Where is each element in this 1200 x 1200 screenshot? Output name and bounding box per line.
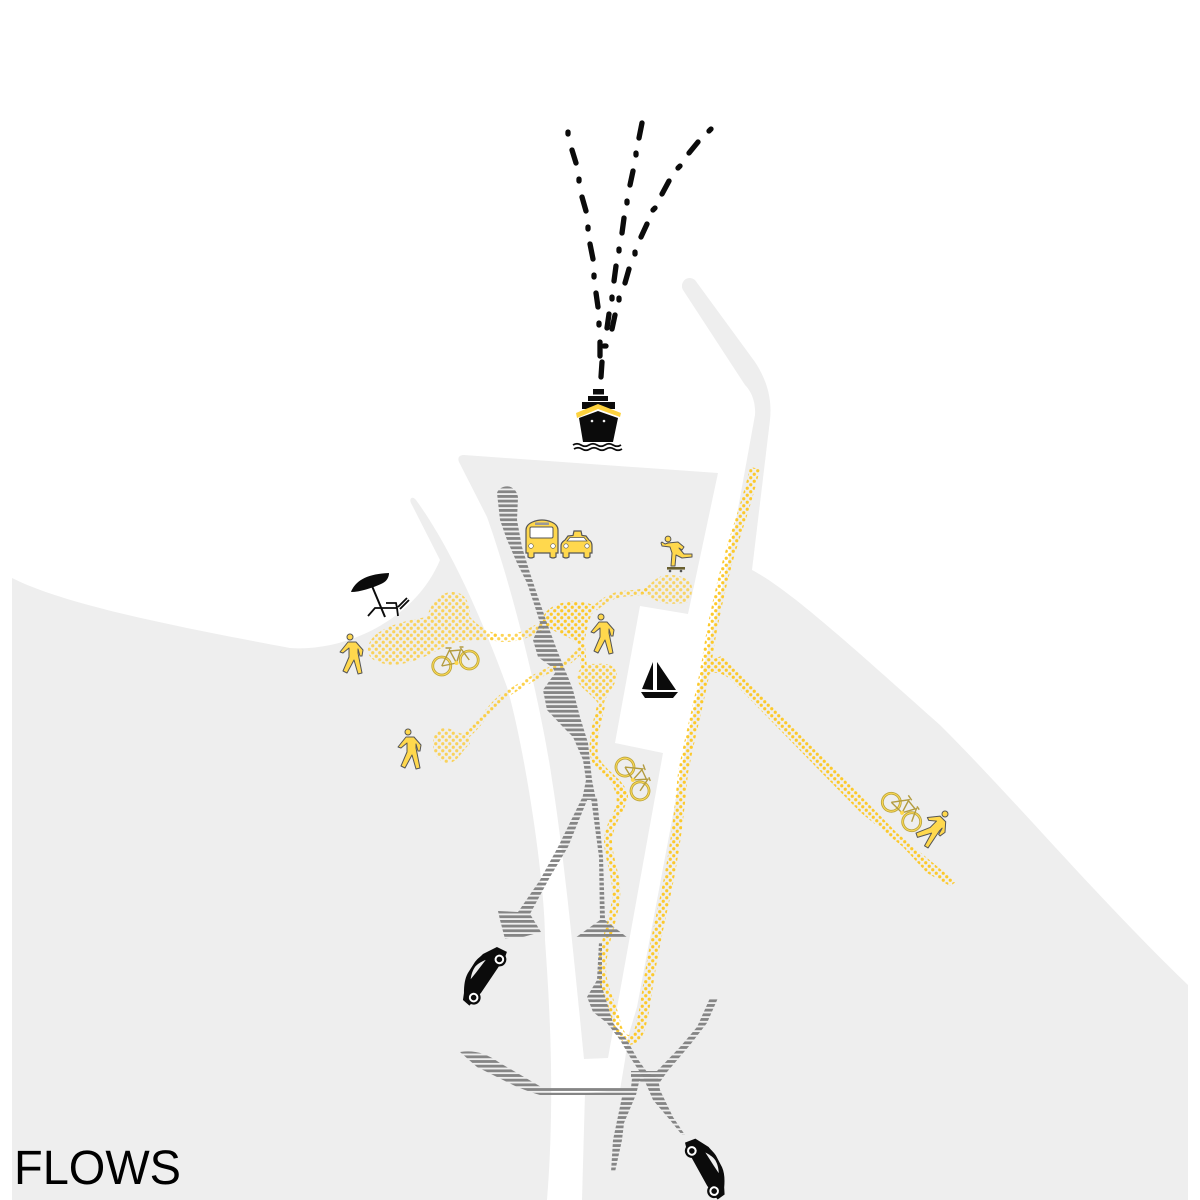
icon: car north [453,940,511,1009]
icon: bicycle pier [613,752,655,804]
icon: pedestrian east [912,805,956,849]
path: east diagonal [700,656,956,886]
ferry routes (dashed) [568,123,711,377]
title: FLOWS [14,1142,181,1195]
icon: pedestrian west [340,634,363,674]
icon: sailboat [641,662,678,698]
east land [582,278,1188,1200]
route: centre [604,123,642,346]
stripe: south spur [587,942,685,1135]
pedestrian and bike flows (yellow halftone) [368,468,956,1040]
link: beach to central plaza [490,620,550,638]
stripe: east arm [631,998,718,1082]
icon: car south [681,1133,735,1200]
icon: ferry [573,389,622,450]
blob: south of plaza [577,664,617,708]
route: left [568,132,602,377]
icon: bus [526,520,558,558]
route: right [612,129,711,329]
blob: lower west [433,728,470,763]
link: lower west to plaza [466,648,582,736]
blob: central plaza [543,602,594,648]
vehicle flows (grey stripes) [460,486,718,1172]
icon: pedestrian lower west [398,729,421,769]
stripe: branch to car north [498,798,588,939]
icon: bicycle east [879,784,927,838]
link: central plaza to south blob [582,645,584,668]
blob: by pier bike [610,782,628,808]
stripe: south arm [611,1097,635,1172]
stripe: west arm [460,1051,640,1095]
icon: pedestrian plaza [591,614,614,654]
icon: taxi [561,531,592,558]
icon: beach umbrella and lounger [351,573,409,617]
blob: beach plaza [368,592,497,665]
link: central plaza to skate area [595,590,648,608]
path: down the pier past bike [594,706,628,1040]
stripe: branch to cone [575,798,628,938]
west land [12,498,551,1200]
stripe: main road through pier [497,486,596,800]
icon: skateboarder [661,536,692,572]
icon: bicycle west [433,647,478,675]
blob: skate area [640,575,692,604]
central pier [458,455,718,1059]
path: east pier walkway [628,468,755,1040]
